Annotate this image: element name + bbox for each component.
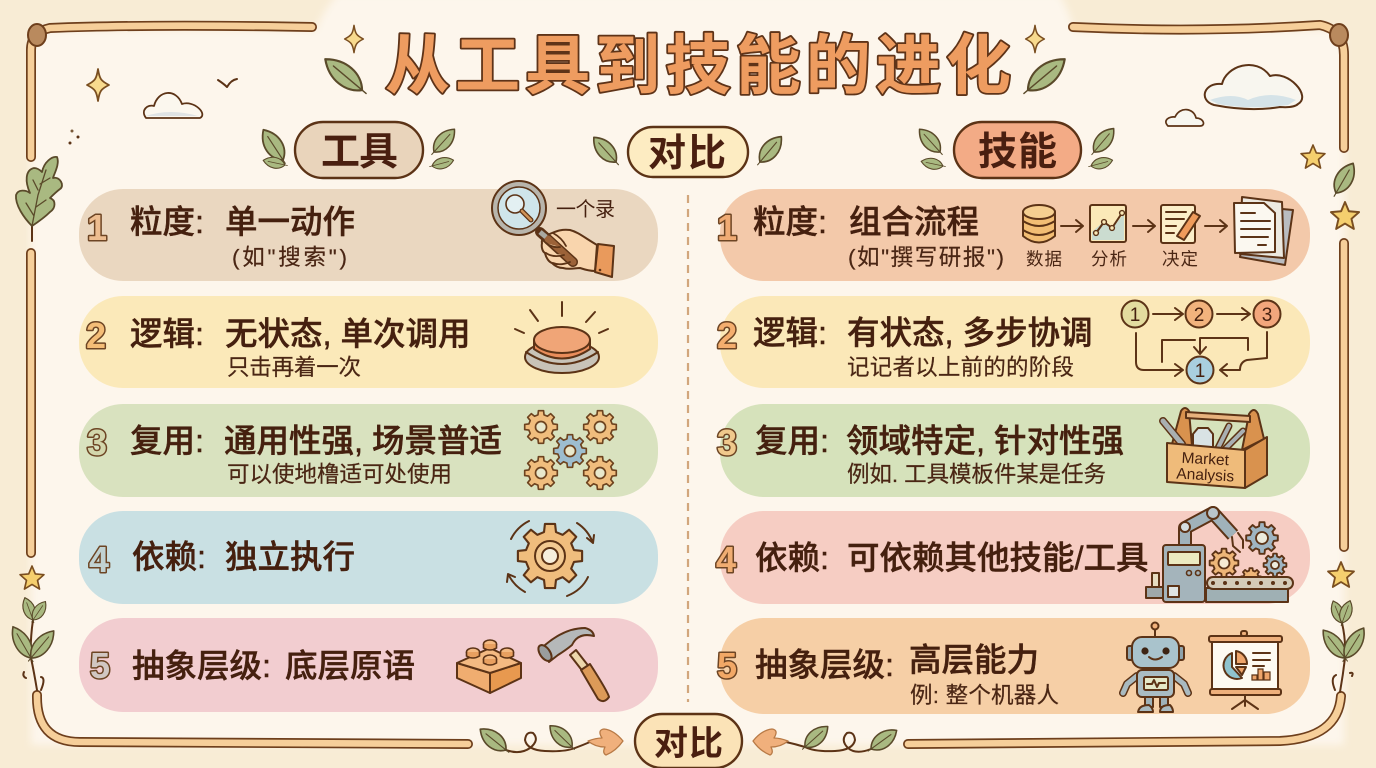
text: granularity: 粒度: [753,204,827,240]
number 3: 3 [87,422,107,463]
footer badge: 对比: 对比 [654,725,723,763]
text: logic: 无状态, 单次调用 [225,316,471,352]
text: abstraction note: 例: 整个机器人 [910,683,1059,708]
text: abstraction: 底层原语 [285,648,415,684]
arrows: process [1061,220,1227,232]
text: toolbox label: Market [1181,450,1230,469]
decoration: oak leaf [16,157,62,241]
text: logic note: 记记者以上前的的阶段 [847,355,1074,380]
captions: process steps: 分析 [1091,249,1127,269]
text: reuse note: 例如. 工具模板件某是任务 [847,462,1106,487]
text: dependency: 依赖: [132,539,206,575]
text: reuse: 通用性强, 场景普适 [224,423,502,459]
number 5: 5 [717,645,737,686]
icon: robotic factory [1146,507,1293,602]
text: logic: 逻辑: [753,315,827,351]
number 1: 1 [717,207,737,248]
decoration: sprig right [1317,599,1370,692]
icon: document stack [1234,197,1293,265]
diagram: state flow: 1 [1195,361,1205,382]
footer vine right with arrow [753,721,901,757]
icon: hammer [536,628,609,701]
panel: skill row 5 abstraction [717,618,1310,714]
text: reuse note: 可以使地橹适可处使用 [227,462,452,487]
number 4: 4 [716,539,736,580]
panel: tool row 3 reuse [79,404,658,497]
captions: process steps: 数据 [1026,249,1062,269]
text: dependency: 依赖: [755,540,829,576]
footer vine left with arrow [475,720,623,758]
icon: building brick [457,640,521,693]
heading: 技能: 技能 [978,131,1057,174]
panel: tool row 4 dependency [79,511,658,604]
text: dependency: 独立执行 [225,539,355,575]
decorations: clouds right [1166,65,1302,126]
panel: skill row 1 granularity [717,189,1310,281]
panel: tool row 5 abstraction [79,618,658,712]
panel: skill row 4 dependency [716,507,1310,604]
text: toolbox label [1176,450,1235,486]
captions: process steps: 决定 [1162,249,1198,269]
icon: robot [1123,622,1188,712]
text: logic note: 只击再着一次 [227,355,361,380]
text: reuse: 复用: [755,423,829,459]
number 1: 1 [87,207,107,248]
text: reuse: 领域特定, 针对性强 [846,423,1124,459]
text: granularity note: (如"撰写研报") [848,245,1004,270]
number 2: 2 [717,315,737,356]
panel: skill row 3 reuse [717,404,1310,497]
number 2: 2 [86,315,106,356]
divider [687,195,689,702]
heading: 技能 [914,122,1119,178]
text: abstraction: 抽象层级: [755,647,894,683]
text: granularity: 组合流程 [849,204,979,240]
diagram: state flow: 1 [1130,305,1140,326]
icon: chart [1090,205,1126,242]
icon: toolbox [1163,408,1267,488]
diagram: state flow: 3 [1262,305,1272,326]
text: high-level capability: 高层能力 [909,642,1039,678]
number 4: 4 [89,539,109,580]
icon: data cylinder [1023,205,1055,242]
text: granularity note: (如"搜索") [232,245,347,270]
panel: tool row 1 granularity [79,181,658,281]
text: logic: 有状态, 多步协调 [847,315,1093,351]
text: reuse: 复用: [130,423,204,459]
decorations: stars and leaf right [20,145,1360,589]
heading: 对比: 对比 [648,133,726,175]
diagram: state flow: 2 [1194,305,1204,326]
decorations: title sparkles and leaves [319,25,1071,101]
text: dependency: 可依赖其他技能/工具 [847,540,1149,576]
icon: rotating gear [507,521,594,596]
heading: 工具 [256,122,460,178]
text: abstraction: 抽象层级: [132,648,271,684]
title: 从工具到技能的进化 [385,29,1011,102]
number 3: 3 [717,422,737,463]
text: logic: 逻辑: [130,316,204,352]
text: granularity: 粒度: [130,204,204,240]
text: granularity: 单一动作 [225,204,355,240]
footer badge: 对比 [635,714,742,768]
heading: 工具: 工具 [321,131,398,174]
decorations: sky left [68,69,237,144]
panel: tool row 2 logic [79,296,658,388]
text: icon caption: 一个录 [556,198,615,221]
icon: presentation board [1209,631,1282,709]
icon: five gears [525,411,616,489]
number 5: 5 [90,645,110,686]
icon: glowing button [515,302,608,373]
diagram: state flow [1122,300,1280,384]
panel: skill row 2 logic [717,296,1310,388]
text: toolbox label: Analysis [1176,466,1235,486]
heading: 对比 [588,127,787,177]
captions: process steps [1026,249,1198,269]
decoration: sprig left [7,596,59,690]
icon: magnifier and hand [492,181,614,277]
icon: note and pencil [1161,205,1200,243]
